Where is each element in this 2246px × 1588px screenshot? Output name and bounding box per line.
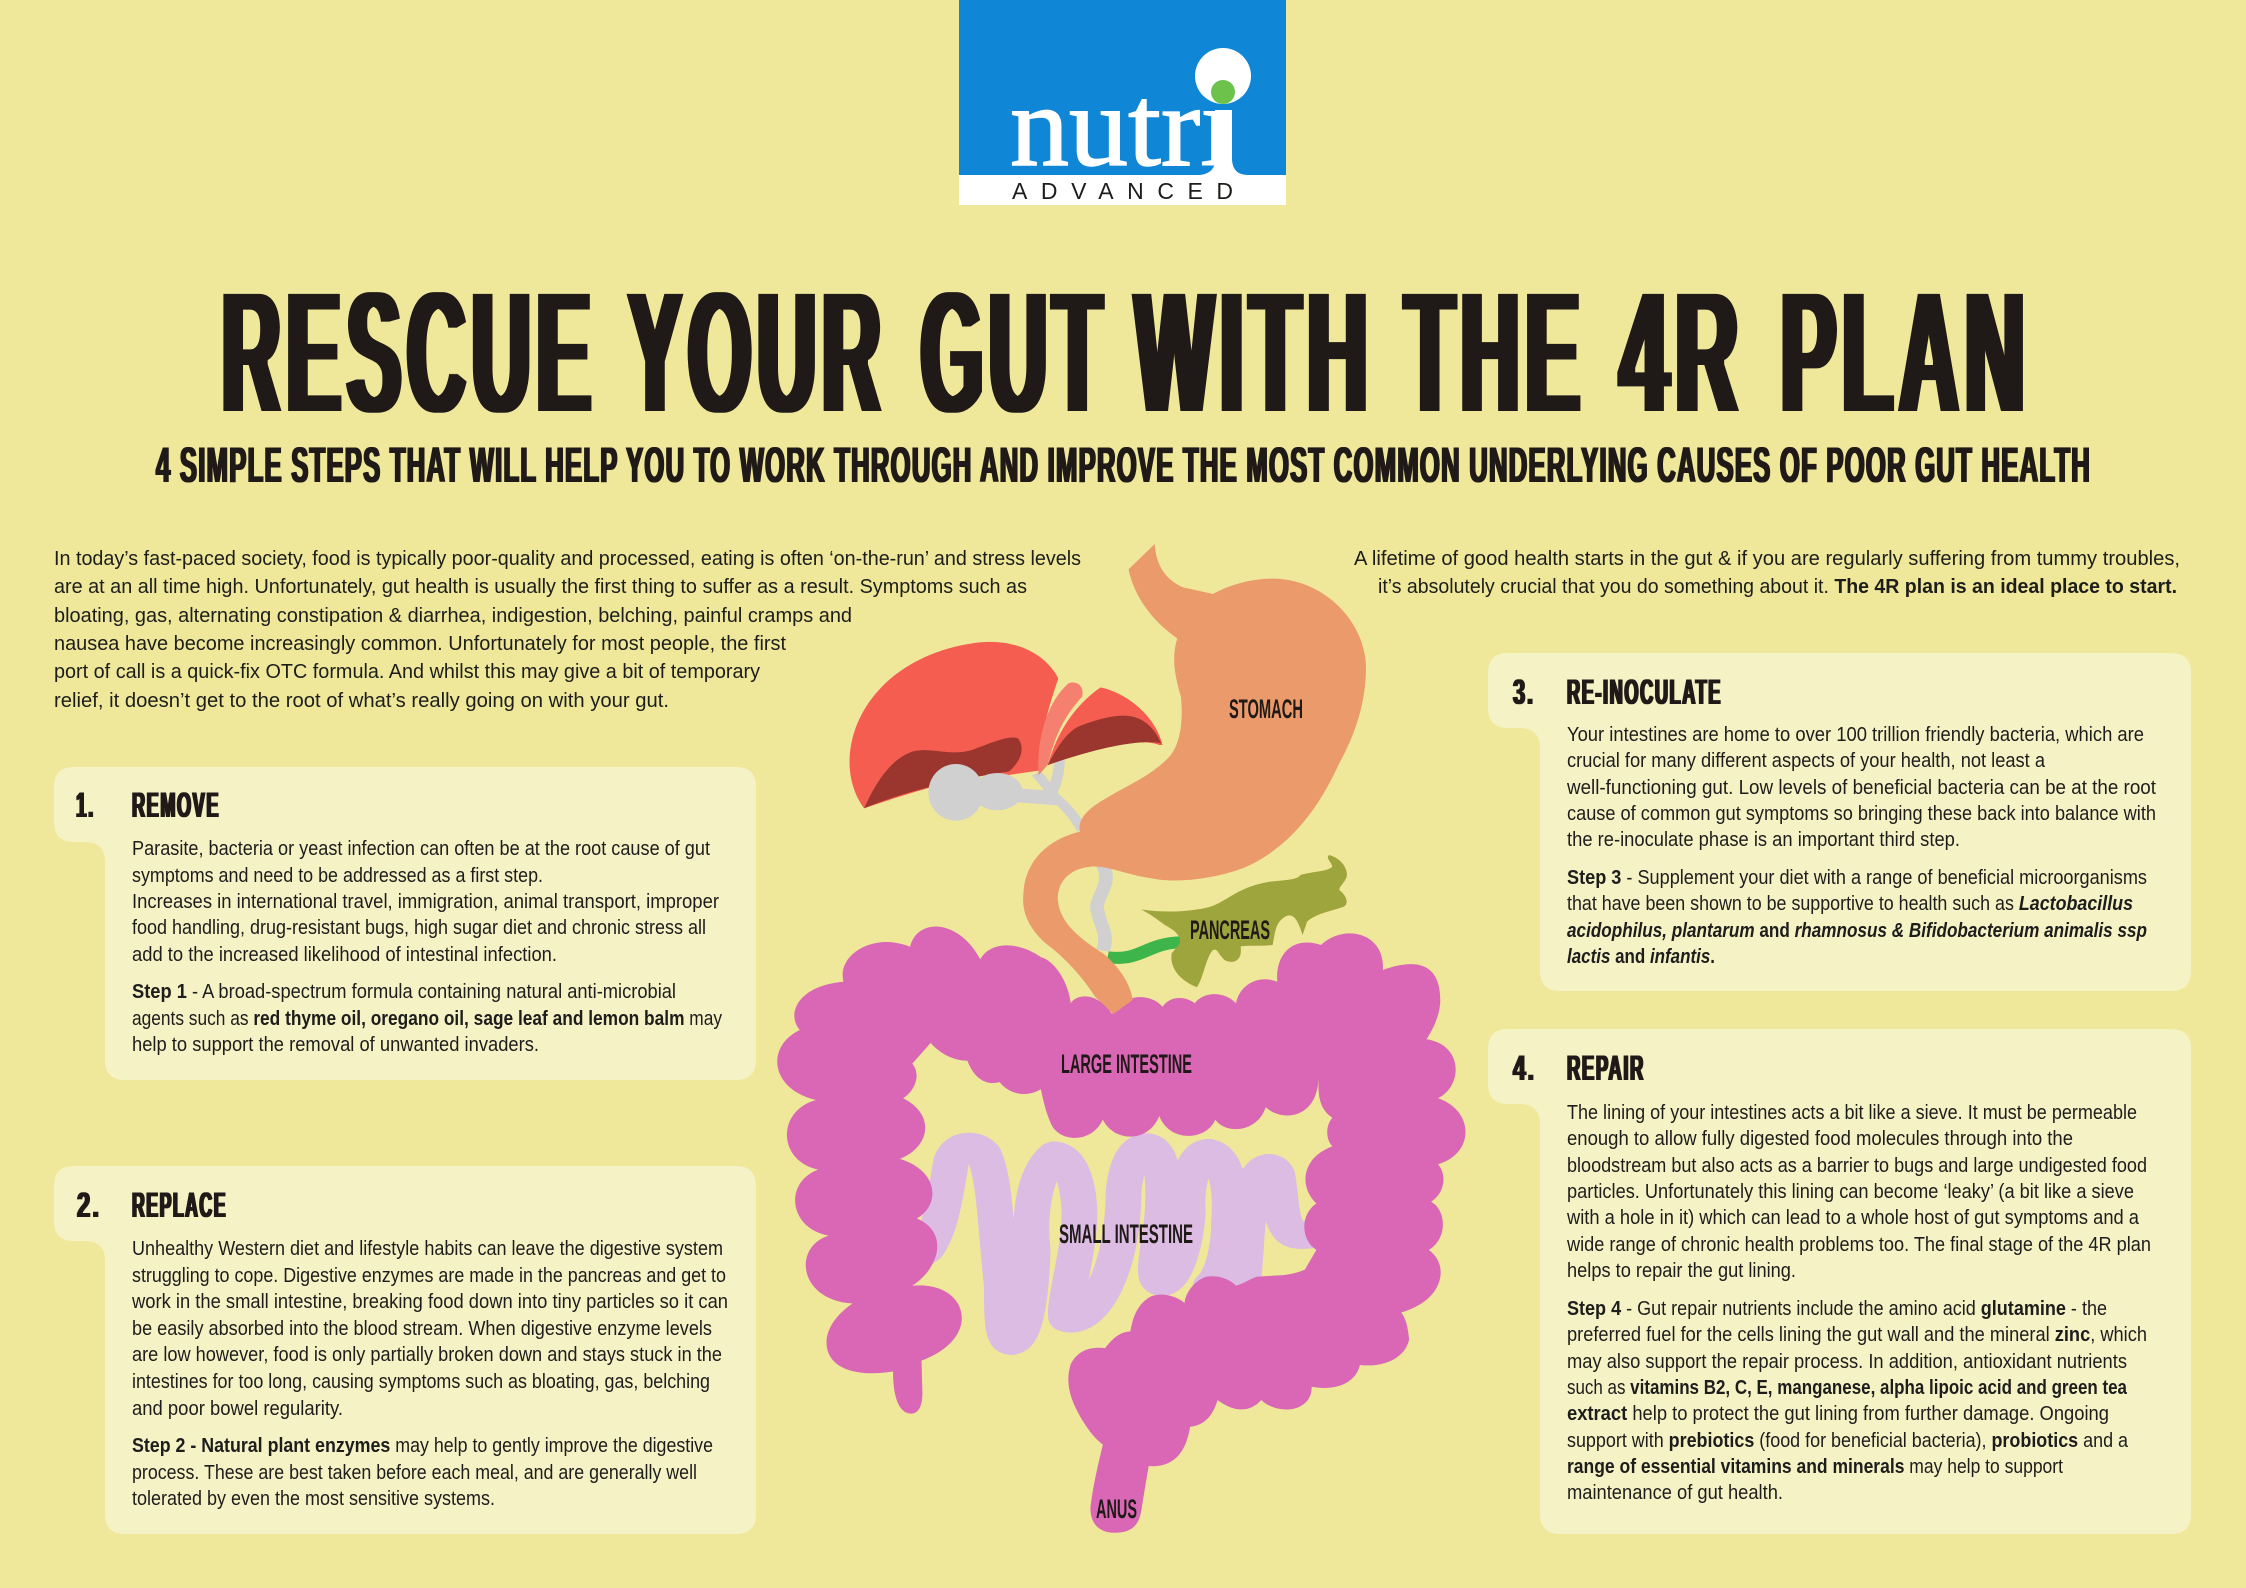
body text: maintenance of gut health.: [1567, 1482, 1783, 1504]
heading: remove: REMOVE: [132, 786, 220, 825]
intro text: left: In today’s fast-paced society, food is typically poor-quality and processed, eating is often ‘on-the-run’ and stress levels: [54, 548, 1081, 570]
body text: preferred fuel for the cells lining the gut wall and the mineral zinc, which: [1567, 1324, 2147, 1346]
intro text: right: A lifetime of good health starts in the gut & if you are regularly suffering from tummy troubles,: [1354, 548, 2180, 570]
body text: lactis and infantis.: [1567, 946, 1715, 968]
body text: the re-inoculate phase is an important third step.: [1567, 829, 1960, 851]
body text: cause of common gut symptoms so bringing these back into balance with: [1567, 803, 2156, 825]
body text: tolerated by even the most sensitive systems.: [132, 1488, 495, 1510]
body text: acidophilus, plantarum and rhamnosus & Bifidobacterium animalis ssp: [1567, 920, 2147, 942]
pancreatic duct: [1107, 942, 1182, 958]
panel: 3 re-inoculate: [1488, 653, 2191, 991]
bile ducts: [1036, 760, 1106, 951]
title: RESCUE: [222, 255, 597, 451]
heading: step number: 2.: [77, 1186, 101, 1225]
title: THE: [1405, 255, 1586, 451]
body text: enough to allow fully digested food molecules through into the: [1567, 1128, 2073, 1150]
body text: be easily absorbed into the blood stream. When digestive enzyme levels: [132, 1318, 712, 1340]
body text: helps to repair the gut lining.: [1567, 1260, 1796, 1282]
body text: that have been shown to be supportive to health such as Lactobacillus: [1567, 893, 2133, 915]
label: stomach: STOMACH: [1229, 694, 1303, 724]
stomach: [1023, 544, 1366, 1014]
heading: step number: 4.: [1513, 1049, 1536, 1088]
heading: step number: 3.: [1513, 673, 1535, 712]
panel background: [54, 1166, 756, 1534]
logo: nutri advanced: ADVANCED: [1012, 178, 1233, 204]
body text: wide range of chronic health problems too. The final stage of the 4R plan: [1566, 1234, 2151, 1256]
gallbladder: [928, 764, 1057, 821]
heading: re-inoculate: RE-INOCULATE: [1567, 673, 1722, 712]
body text: agents such as red thyme oil, oregano oil, sage leaf and lemon balm may: [132, 1008, 722, 1030]
large intestine: [777, 926, 1466, 1533]
body text: work in the small intestine, breaking food down into tiny particles so it can: [131, 1291, 728, 1313]
body text: intestines for too long, causing symptoms such as bloating, gas, belching: [132, 1371, 710, 1393]
pancreas: [1141, 855, 1347, 987]
body text: symptoms and need to be addressed as a first step.: [132, 865, 543, 887]
panel background: [1488, 653, 2191, 991]
body text: range of essential vitamins and minerals may help to support: [1567, 1456, 2063, 1478]
intro text: left: are at an all time high. Unfortunately, gut health is usually the first thing to suffer as a result. Symptoms such as: [54, 576, 1027, 598]
body text: bloodstream but also acts as a barrier to bugs and large undigested food: [1567, 1155, 2147, 1177]
digestive system illustration: [777, 544, 1466, 1533]
heading: step number: 1.: [76, 786, 95, 825]
title: 4R: [1620, 255, 1745, 451]
body text: [131, 1238, 728, 1510]
body text: Your intestines are home to over 100 trillion friendly bacteria, which are: [1567, 724, 2144, 746]
body text: may also support the repair process. In addition, antioxidant nutrients: [1567, 1351, 2127, 1373]
body text: Parasite, bacteria or yeast infection can often be at the root cause of gut: [132, 838, 710, 860]
body text: Step 3 - Supplement your diet with a range of beneficial microorganisms: [1567, 867, 2147, 889]
body text: and poor bowel regularity.: [132, 1398, 343, 1420]
heading: repair: REPAIR: [1567, 1049, 1645, 1088]
title: [222, 255, 2031, 451]
label: pancreas: PANCREAS: [1190, 915, 1270, 945]
intro text: left: bloating, gas, alternating constipation & diarrhea, indigestion, belching, painful cramps and: [54, 605, 852, 627]
title: WITH: [1135, 255, 1374, 451]
body text: crucial for many different aspects of your health, not least a: [1567, 750, 2046, 772]
logo: nutri advanced: nutri: [1010, 63, 1233, 190]
body text: well-functioning gut. Low levels of beneficial bacteria can be at the root: [1566, 777, 2156, 799]
intro text: right: [1354, 548, 2180, 598]
panel: 4 repair: [1488, 1029, 2191, 1534]
body text: Step 4 - Gut repair nutrients include the amino acid glutamine - the: [1567, 1298, 2107, 1320]
intro text: left: [54, 548, 1081, 712]
body text: support with prebiotics (food for beneficial bacteria), probiotics and a: [1567, 1430, 2129, 1452]
intro text: left: port of call is a quick-fix OTC formula. And whilst this may give a bit of temporary: [54, 661, 760, 683]
label: anus: ANUS: [1096, 1494, 1137, 1524]
liver: [850, 642, 1163, 808]
body text: add to the increased likelihood of intestinal infection.: [132, 944, 557, 966]
body text: struggling to cope. Digestive enzymes are made in the pancreas and get to: [132, 1265, 726, 1287]
logo: nutri advanced: [959, 0, 1286, 205]
body text: Unhealthy Western diet and lifestyle habits can leave the digestive system: [132, 1238, 723, 1260]
body text: The lining of your intestines acts a bit like a sieve. It must be permeable: [1567, 1102, 2137, 1124]
body text: are low however, food is only partially broken down and stays stuck in the: [132, 1344, 722, 1366]
label: large intestine: LARGE INTESTINE: [1061, 1049, 1192, 1079]
body text: particles. Unfortunately this lining can become ‘leaky’ (a bit like a sieve: [1567, 1181, 2134, 1203]
body text: process. These are best taken before each meal, and are generally well: [132, 1462, 697, 1484]
body text: with a hole in it) which can lead to a whole host of gut symptoms and a: [1566, 1207, 2140, 1229]
body text: help to support the removal of unwanted invaders.: [132, 1034, 539, 1056]
body text: [132, 838, 722, 1056]
body text: food handling, drug-resistant bugs, high sugar diet and chronic stress all: [132, 917, 706, 939]
label: small intestine: SMALL INTESTINE: [1059, 1219, 1193, 1249]
heading: replace: REPLACE: [132, 1186, 227, 1225]
title: YOUR: [628, 255, 887, 451]
body text: Step 2 - Natural plant enzymes may help to gently improve the digestive: [132, 1435, 713, 1457]
body text: extract help to protect the gut lining from further damage. Ongoing: [1567, 1403, 2109, 1425]
title: GUT: [921, 255, 1108, 451]
body text: Increases in international travel, immigration, animal transport, improper: [132, 891, 719, 913]
body text: [1566, 724, 2156, 968]
intro text: left: nausea have become increasingly common. Unfortunately for most people, the first: [54, 633, 786, 655]
panel: 1 remove: [54, 767, 756, 1080]
panel background: [54, 767, 756, 1080]
body text: [1566, 1102, 2151, 1504]
panel background: [1488, 1029, 2191, 1534]
body text: such as vitamins B2, C, E, manganese, alpha lipoic acid and green tea: [1567, 1377, 2128, 1399]
panel: 2 replace: [54, 1166, 756, 1534]
body text: Step 1 - A broad-spectrum formula containing natural anti-microbial: [132, 981, 676, 1003]
intro text: right: it’s absolutely crucial that you do something about it. The 4R plan is an ideal place to start.: [1378, 576, 2177, 598]
small intestine: [926, 1147, 1319, 1341]
intro text: left: relief, it doesn’t get to the root of what’s really going on with your gut.: [54, 690, 669, 712]
